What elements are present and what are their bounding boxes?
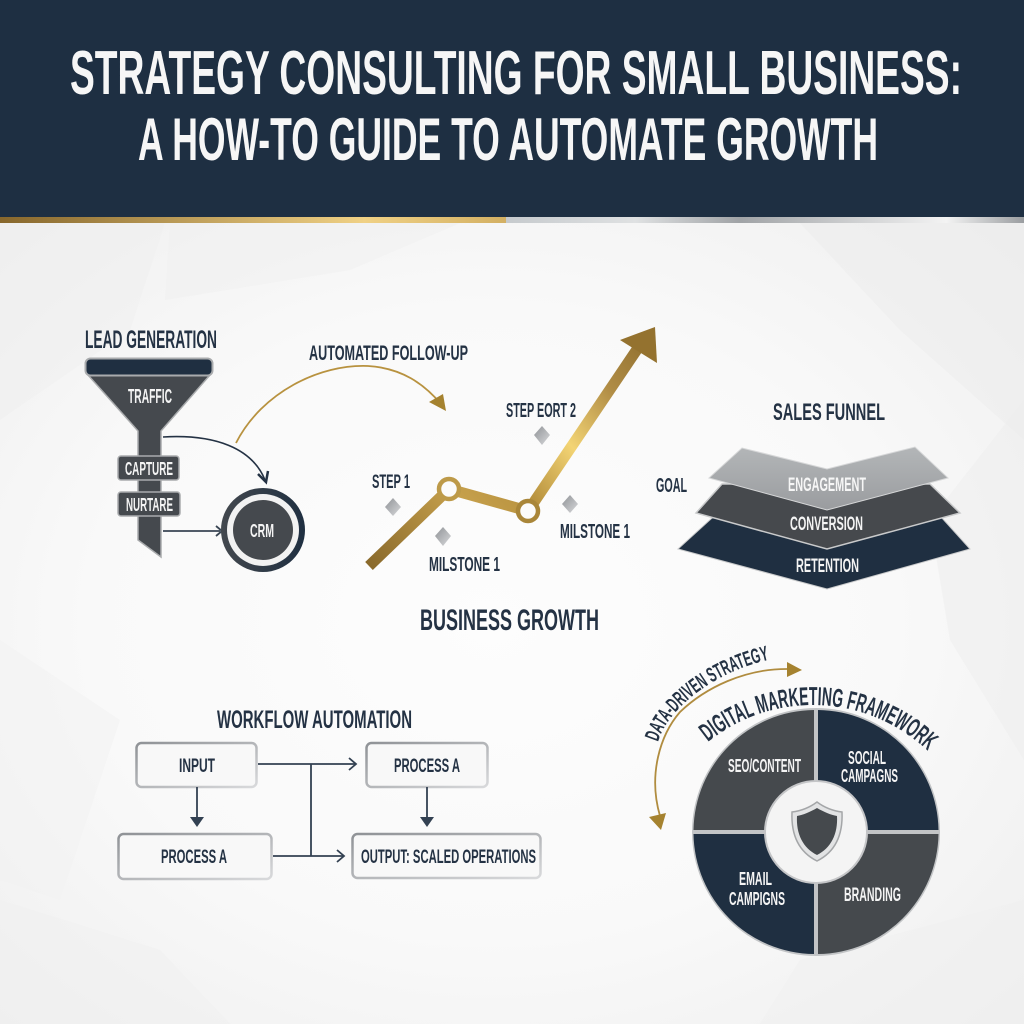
- icon: shield: [792, 802, 842, 861]
- box: output: [352, 834, 540, 878]
- growth line arrow: [369, 327, 657, 566]
- box: process a bottom: [118, 834, 272, 879]
- arrow: funnel to CRM curve: [163, 437, 268, 482]
- CRM circle: [221, 488, 305, 572]
- wheel labels: BRANDING: [844, 885, 901, 906]
- header banner: [0, 0, 1024, 217]
- segment: email campaigns: [694, 834, 814, 954]
- arrow: funnel to CRM straight: [163, 526, 222, 536]
- curved heading: digital marketing framework: DIGITAL MARKETING FRAMEWORK: [698, 687, 940, 751]
- heading: business growth: BUSINESS GROWTH: [420, 604, 599, 637]
- wheel labels: SEO/CONTENT: [728, 756, 801, 776]
- capture tag: [118, 456, 179, 480]
- step and milestone labels: MILSTONE 1: [429, 554, 500, 576]
- wheel: [692, 708, 940, 956]
- label: automated follow-up: AUTOMATED FOLLOW-UP: [309, 342, 468, 365]
- gold accent stripe: [0, 217, 506, 223]
- step and milestone labels: [372, 400, 630, 576]
- layer: engagement: [709, 447, 948, 510]
- wheel labels: SOCIAL: [848, 748, 886, 768]
- box: input: [136, 743, 256, 787]
- wheel labels: [728, 748, 901, 909]
- wheel labels: CAMPAGNS: [841, 766, 898, 786]
- heading: lead generation: LEAD GENERATION: [85, 326, 217, 354]
- label: goal: GOAL: [656, 475, 687, 497]
- background with faceted pattern: [0, 223, 1024, 1024]
- box: input: INPUT: [179, 756, 215, 777]
- curved label: data-driven strategy: DATA-DRIVEN STRATEGY: [644, 646, 766, 742]
- box: process a top: PROCESS A: [394, 756, 460, 777]
- layer: engagement: ENGAGEMENT: [788, 475, 866, 496]
- layer: retention: [678, 518, 970, 589]
- step and milestone labels: STEP EORT 2: [506, 400, 576, 422]
- layer: conversion: CONVERSION: [790, 514, 863, 535]
- arrow: data-driven strategy arc: [649, 662, 802, 830]
- layer: conversion: [696, 484, 960, 549]
- segment: branding: [818, 834, 938, 954]
- box: output: OUTPUT: SCALED OPERATIONS: [361, 847, 536, 868]
- step and milestone labels: STEP 1: [372, 472, 410, 493]
- nurtare tag: [118, 492, 180, 516]
- nurtare tag: NURTARE: [126, 495, 173, 515]
- heading: sales funnel: SALES FUNNEL: [773, 399, 885, 426]
- segment: social campaigns: [818, 710, 938, 830]
- workflow connector arrows: [190, 758, 434, 862]
- box: process a bottom: PROCESS A: [161, 847, 227, 868]
- wheel labels: CAMPIGNS: [729, 889, 785, 909]
- title: [70, 39, 962, 173]
- panel: business growth chart: [369, 327, 657, 637]
- panel: sales funnel: [656, 399, 970, 589]
- segment: seo/content: [694, 710, 814, 830]
- heading: workflow automation: WORKFLOW AUTOMATION: [217, 706, 412, 734]
- silver accent stripe: [506, 217, 1024, 223]
- funnel icon: [86, 358, 212, 557]
- wheel labels: EMAIL: [739, 869, 772, 889]
- layer: retention: RETENTION: [796, 556, 859, 577]
- box: process a top: [366, 743, 488, 787]
- arrow: automated follow-up arc: [236, 366, 446, 443]
- funnel icon: TRAFFIC: [128, 386, 172, 408]
- CRM circle: CRM: [250, 521, 274, 541]
- panel: lead generation: [85, 326, 305, 572]
- capture tag: CAPTURE: [125, 459, 173, 479]
- panel: digital marketing framework: [644, 646, 940, 956]
- panel: workflow automation: [118, 706, 540, 879]
- hub: [765, 781, 867, 883]
- milestone diamonds: [385, 426, 578, 546]
- step and milestone labels: MILSTONE 1: [560, 521, 630, 543]
- panel: automated follow-up: [236, 342, 468, 443]
